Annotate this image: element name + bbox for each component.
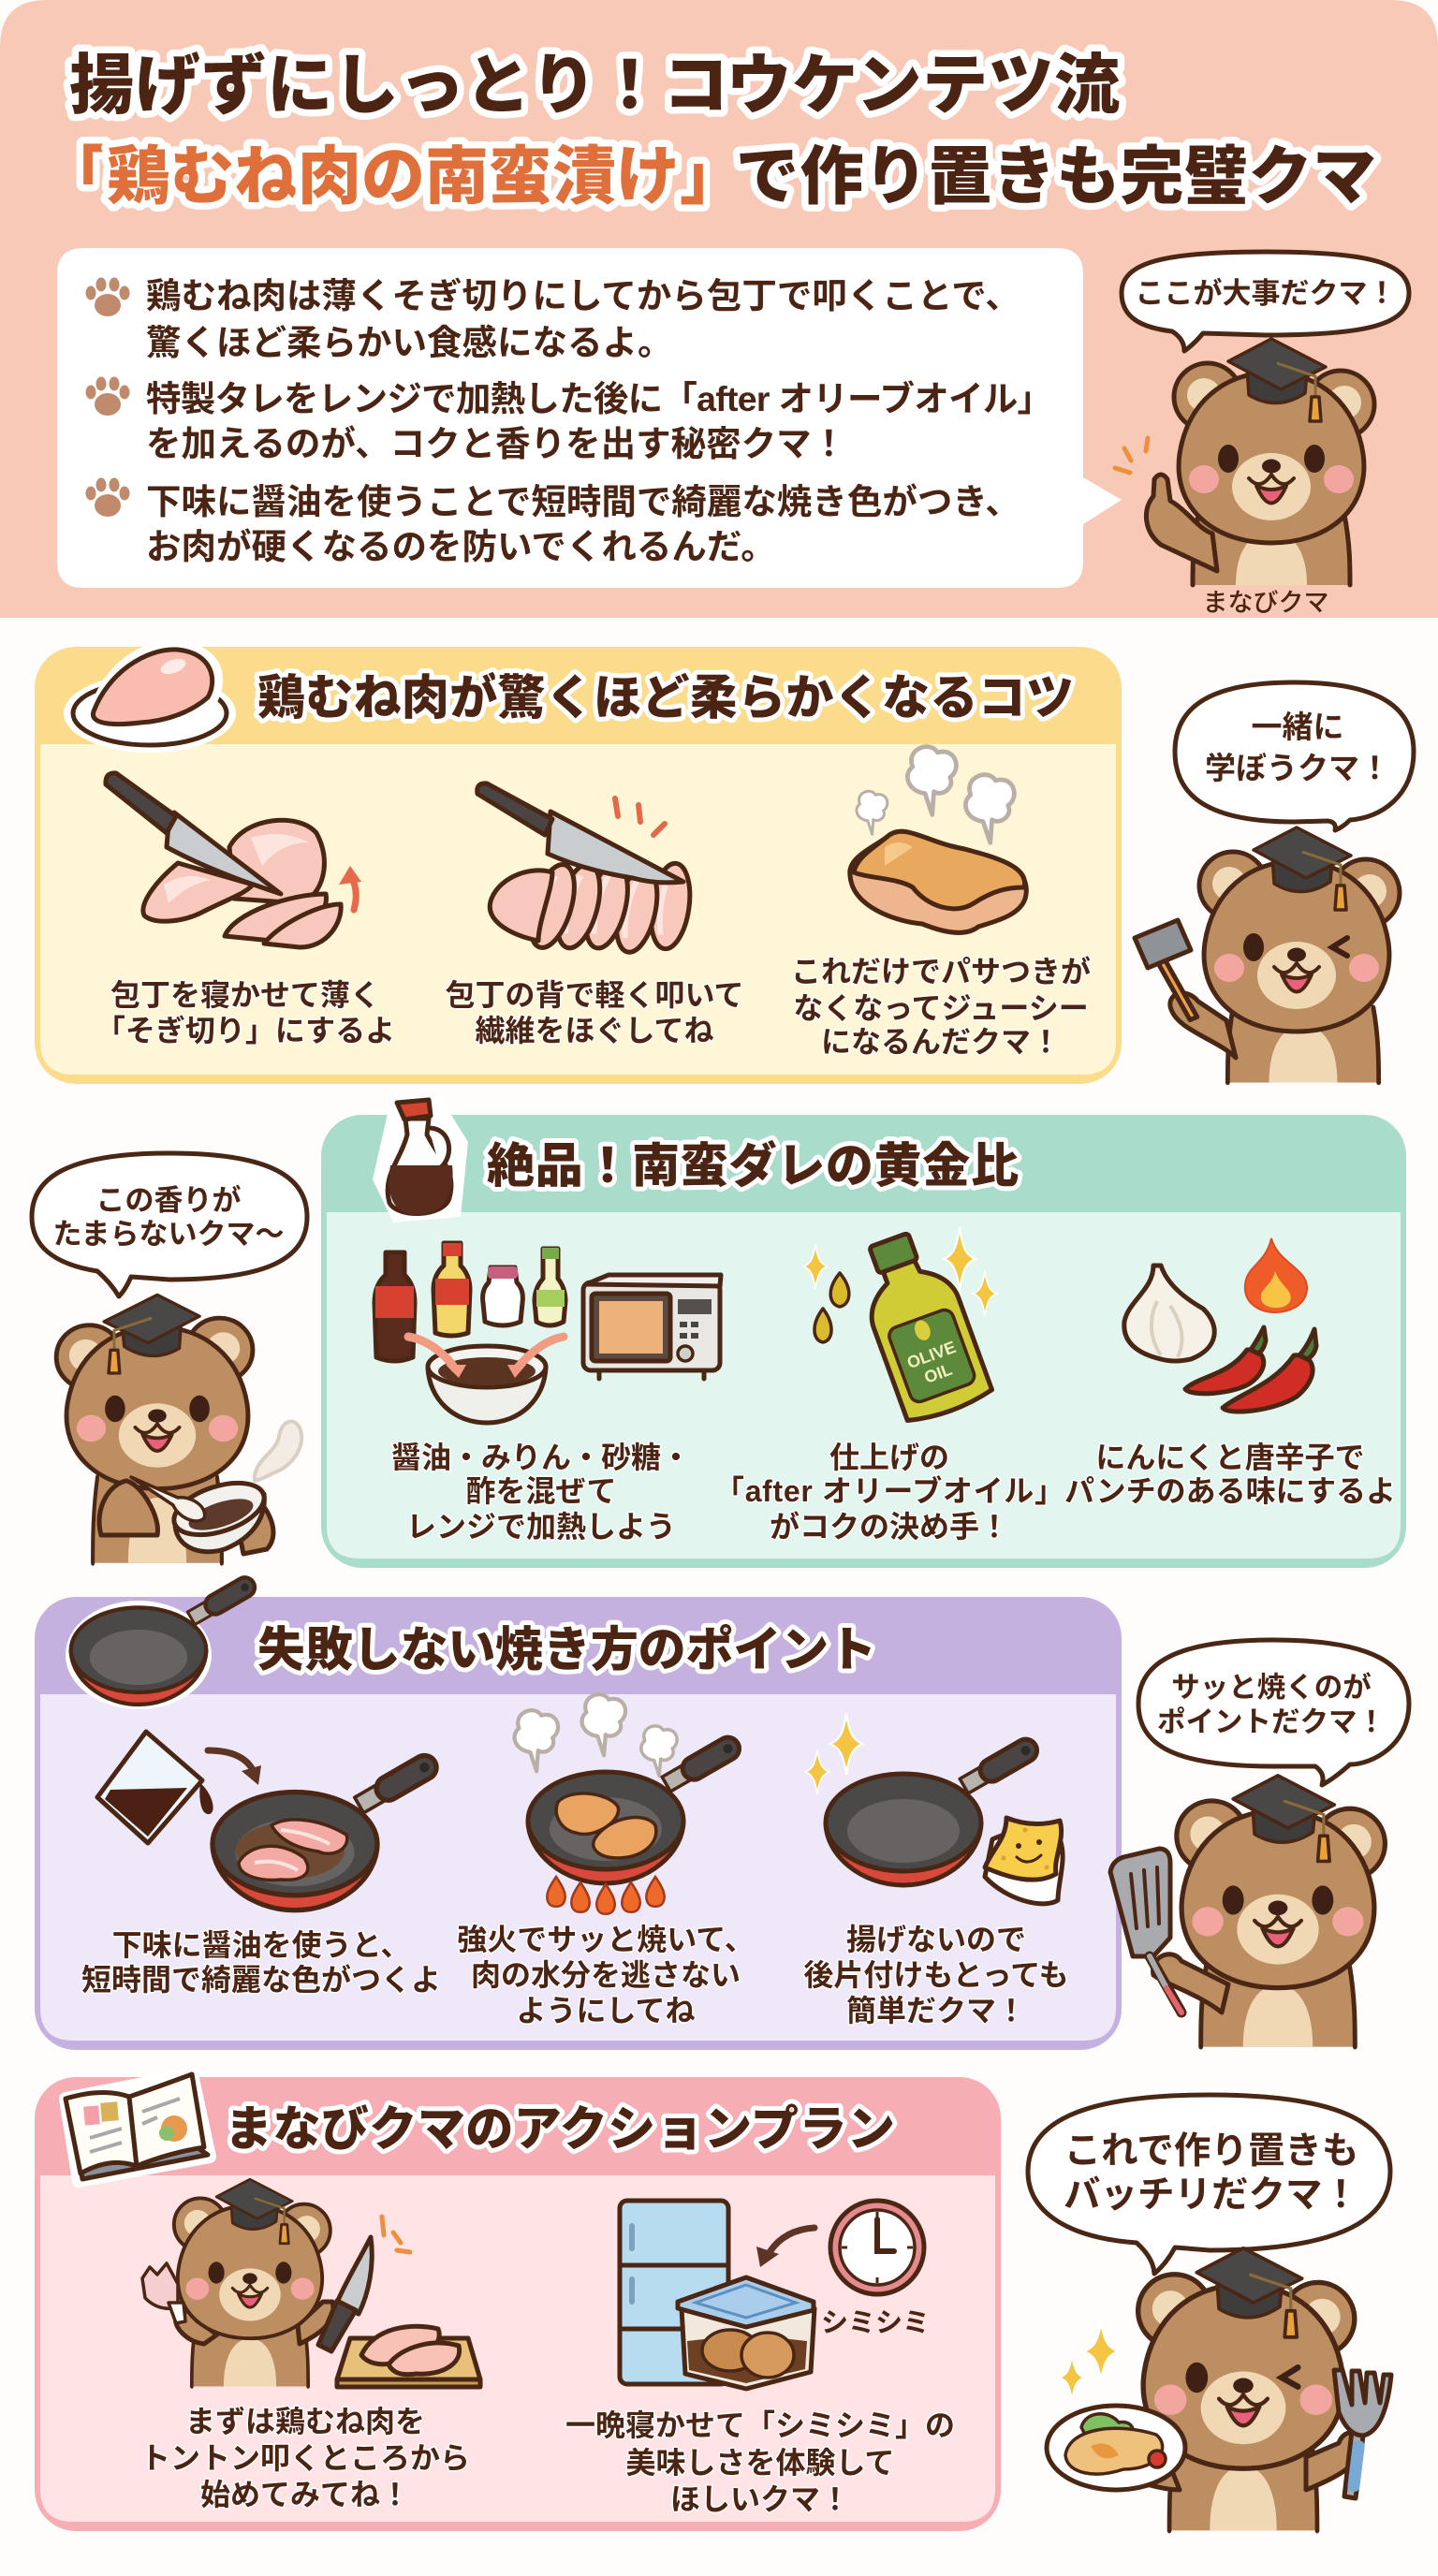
text: point 3: お肉が硬くなるのを防いでくれるんだ。 bbox=[146, 527, 776, 566]
panel: header background bbox=[0, 0, 1438, 618]
caption 2: 美味しさを体験して bbox=[625, 2446, 895, 2480]
text: point 1: 驚くほど柔らかい食感になるよ。 bbox=[146, 323, 672, 362]
caption 1: 「そぎ切り」にするよ bbox=[95, 1014, 395, 1047]
caption 3 bbox=[791, 955, 1091, 1059]
icon: recipe book bbox=[66, 2074, 210, 2181]
speech bubble: 一緒に学ぼうクマ: 一緒に bbox=[1251, 710, 1344, 744]
caption 2: 肉の水分を逃さない bbox=[471, 1958, 741, 1992]
caption 2: 強火でサッと焼いて、 bbox=[457, 1923, 755, 1956]
illustration: slicing chicken bbox=[106, 773, 361, 947]
speech bubble: サッと焼くのが bbox=[1138, 1640, 1409, 1785]
heading: 鶏むね肉が驚くほど柔らかくなるコツ bbox=[257, 671, 1074, 724]
title: で作り置きも完璧クマ bbox=[736, 141, 1376, 212]
illustration: fridge, clock and container: シミシミ bbox=[821, 2308, 930, 2338]
speech bubble: これで作り置きも: これで作り置きも bbox=[1064, 2130, 1358, 2172]
caption 2 bbox=[714, 1441, 1064, 1544]
character: bear with hammer bbox=[1135, 827, 1400, 1082]
speech bubble: 一緒に学ぼうクマ bbox=[1175, 682, 1414, 830]
speech bubble: ここが大事だクマ: ここが大事だクマ！ bbox=[1135, 277, 1397, 310]
caption 3: になるんだクマ！ bbox=[821, 1025, 1061, 1059]
illustration: fridge, clock and container bbox=[620, 2201, 930, 2389]
icon: chicken on plate bbox=[64, 640, 236, 753]
caption 2: がコクの決め手！ bbox=[770, 1510, 1009, 1544]
panel: action plan bbox=[35, 2074, 1001, 2531]
title bbox=[43, 49, 1376, 212]
speech bubble: この香りが: たまらないクマ～ bbox=[52, 1218, 285, 1251]
caption 3: 簡単だクマ！ bbox=[846, 1994, 1026, 2027]
illustration: bear with knife and chicken bbox=[142, 2179, 480, 2387]
caption 2: ほしいクマ！ bbox=[670, 2482, 850, 2516]
heading: 絶品！南蛮ダレの黄金比 bbox=[487, 1139, 1019, 1193]
illustration: seasonings and microwave bbox=[374, 1243, 721, 1423]
caption 1: 下味に醤油を使うと、 bbox=[112, 1928, 410, 1962]
icon: paw 1 bbox=[86, 277, 129, 316]
character: bear tasting sauce bbox=[56, 1295, 301, 1563]
text: point 2 bbox=[146, 379, 1052, 463]
text: point 3: 下味に醤油を使うことで短時間で綺麗な焼き色がつき、 bbox=[146, 482, 1020, 521]
caption 2: 包丁の背で軽く叩いて bbox=[445, 978, 744, 1012]
illustration: garlic, chili, flame bbox=[1124, 1238, 1316, 1412]
illustration: quick high-heat sear bbox=[515, 1694, 743, 1914]
caption 3: 揚げないので bbox=[846, 1923, 1026, 1956]
illustration: soy sauce into pan bbox=[97, 1732, 441, 1910]
icon: sauce jug bbox=[373, 1097, 468, 1222]
panel: cooking tips bbox=[35, 1574, 1122, 2050]
caption 2 bbox=[445, 978, 744, 1047]
panel: sauce ratio bbox=[321, 1097, 1406, 1568]
caption 3: なくなってジューシー bbox=[793, 991, 1089, 1025]
text: point 2: を加えるのが、コクと香りを出す秘密クマ！ bbox=[146, 424, 846, 463]
caption 1 bbox=[95, 978, 395, 1047]
text: point 1 bbox=[146, 276, 1020, 362]
illustration: olive oil: OLIVE bbox=[904, 1338, 959, 1372]
caption 1 bbox=[81, 1928, 441, 1997]
illustration: olive oil: OIL bbox=[922, 1360, 955, 1387]
text: point 1: 鶏むね肉は薄くそぎ切りにしてから包丁で叩くことで、 bbox=[146, 276, 1020, 315]
character: bear with spatula bbox=[1110, 1776, 1385, 2047]
caption 1: 短時間で綺麗な色がつくよ bbox=[81, 1963, 441, 1997]
panel: key points speech box bbox=[57, 248, 1122, 588]
caption 3: にんにくと唐辛子で bbox=[1095, 1441, 1365, 1474]
caption 1: まずは鶏むね肉を bbox=[185, 2405, 425, 2438]
speech bubble: 一緒に学ぼうクマ: 学ぼうクマ！ bbox=[1205, 751, 1390, 785]
speech bubble: これで作り置きも bbox=[1028, 2095, 1390, 2274]
caption 1: 醤油・みりん・砂糖・ bbox=[391, 1441, 691, 1474]
title: 「鶏むね肉の南蛮漬け」 bbox=[43, 141, 743, 212]
heading: まなびクマのアクションプラン bbox=[225, 2102, 895, 2156]
caption 1: トントン叩くところから bbox=[140, 2441, 470, 2475]
icon: paw 2 bbox=[86, 376, 129, 416]
caption 2 bbox=[565, 2408, 955, 2516]
caption 2: 「after オリーブオイル」 bbox=[714, 1474, 1064, 1508]
caption 3: これだけでパサつきが bbox=[791, 955, 1091, 988]
speech bubble: サッと焼くのが: ポイントだクマ！ bbox=[1157, 1706, 1386, 1738]
heading: 失敗しない焼き方のポイント bbox=[257, 1623, 876, 1676]
caption 3 bbox=[1064, 1441, 1396, 1508]
illustration: tapping chicken bbox=[477, 783, 695, 956]
caption 3: パンチのある味にするよ bbox=[1064, 1474, 1396, 1508]
panel: chicken tips bbox=[35, 640, 1122, 1084]
character: bear with plate and fork bbox=[1047, 2248, 1391, 2530]
caption 2 bbox=[457, 1923, 755, 2027]
caption 2: 繊維をほぐしてね bbox=[475, 1014, 714, 1047]
caption 1: 包丁を寝かせて薄く bbox=[110, 978, 380, 1012]
illustration: juicy chicken bbox=[850, 747, 1026, 932]
speech bubble: ここが大事だクマ bbox=[1122, 252, 1409, 351]
speech bubble: この香りが: この香りが bbox=[95, 1184, 242, 1217]
caption 1: レンジで加熱しよう bbox=[406, 1510, 676, 1544]
illustration: olive oil bbox=[803, 1224, 997, 1426]
illustration: easy cleanup bbox=[805, 1713, 1063, 1904]
speech bubble: この香りが bbox=[32, 1153, 307, 1296]
caption 1: 始めてみてね！ bbox=[200, 2478, 410, 2511]
caption 1 bbox=[391, 1441, 691, 1544]
caption 2: 一晩寝かせて「シミシミ」の bbox=[565, 2408, 955, 2442]
caption 2: 仕上げの bbox=[829, 1441, 949, 1474]
speech bubble: これで作り置きも: バッチリだクマ！ bbox=[1064, 2174, 1359, 2216]
title: 揚げずにしっとり！コウケンテツ流 bbox=[69, 49, 1120, 122]
text: point 2: 特製タレをレンジで加熱した後に「after オリーブオイル」 bbox=[146, 379, 1052, 418]
speech bubble: サッと焼くのが: サッと焼くのが bbox=[1171, 1671, 1372, 1704]
caption 2: ようにしてね bbox=[516, 1994, 696, 2027]
icon: frying pan bbox=[66, 1574, 258, 1709]
caption 1: 酢を混ぜて bbox=[466, 1474, 616, 1508]
text: point 3 bbox=[146, 482, 1020, 566]
caption 3 bbox=[803, 1923, 1069, 2027]
caption 3: 後片付けもとっても bbox=[803, 1958, 1069, 1992]
caption 1 bbox=[140, 2405, 470, 2511]
character: bear pointing bbox=[1115, 339, 1374, 585]
icon: paw 3 bbox=[86, 477, 129, 517]
label: character name: まなびクマ bbox=[1202, 589, 1329, 617]
